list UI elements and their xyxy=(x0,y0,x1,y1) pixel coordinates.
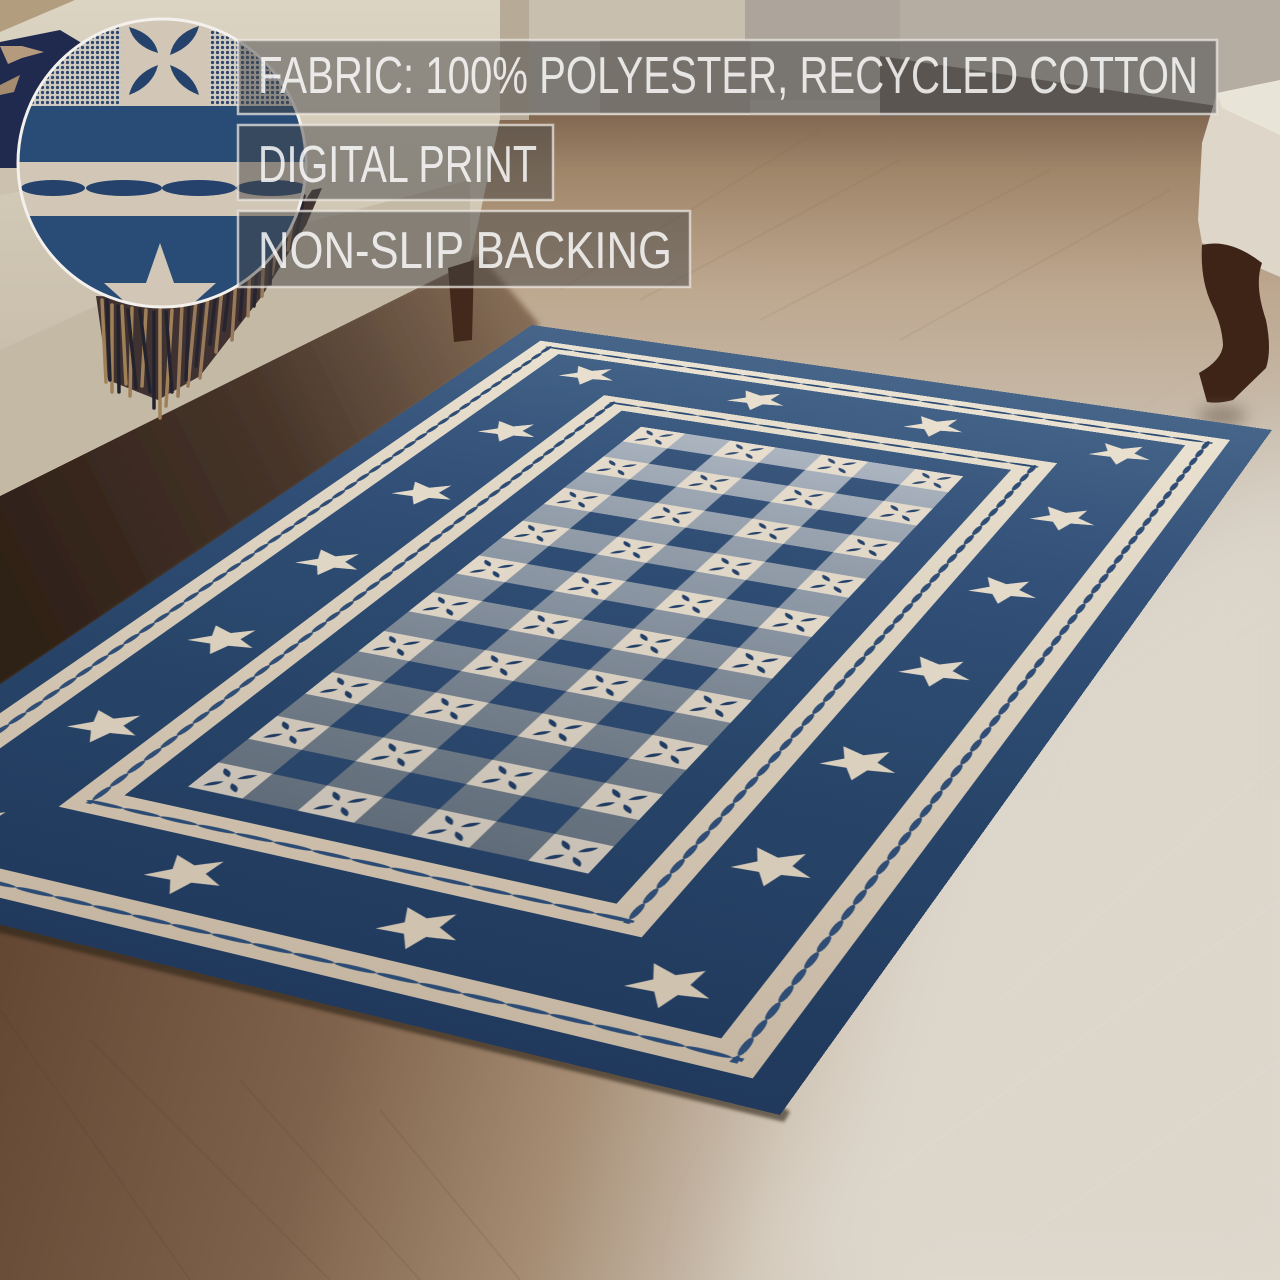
pale floor right xyxy=(760,430,1280,1280)
floor shadow under sofa xyxy=(0,255,540,716)
circle gingham swatch xyxy=(32,26,292,106)
fabric detail circle xyxy=(16,18,308,308)
throw fringe xyxy=(96,188,322,418)
label: digital print xyxy=(238,125,553,200)
circle cream stripe with lens chain xyxy=(20,162,304,216)
sofa leg xyxy=(448,260,474,342)
ottoman leg xyxy=(1199,243,1269,403)
checker panel xyxy=(188,427,963,874)
ottoman leg shadow xyxy=(1198,406,1246,426)
ottoman xyxy=(1198,80,1280,277)
wood floor upper xyxy=(0,100,1280,820)
label: non-slip backing: NON-SLIP BACKING xyxy=(258,222,672,280)
rug base xyxy=(0,325,1272,1115)
circle blue bands xyxy=(20,106,304,302)
label: non-slip backing xyxy=(238,211,690,287)
sofa xyxy=(0,0,529,496)
navy throw on sofa xyxy=(0,30,85,168)
rug outer border xyxy=(0,341,1230,1078)
wood floor lower xyxy=(0,800,1280,1280)
stars xyxy=(0,362,1162,1022)
circle outline xyxy=(18,19,306,307)
rug inner border xyxy=(59,395,1057,937)
circle star xyxy=(104,243,216,310)
rug shadow xyxy=(0,855,790,1122)
label: digital print: DIGITAL PRINT xyxy=(258,136,537,194)
wall and baseboard xyxy=(520,0,1280,116)
rug in perspective xyxy=(0,325,1272,1115)
circle cream square with petals xyxy=(121,20,209,106)
